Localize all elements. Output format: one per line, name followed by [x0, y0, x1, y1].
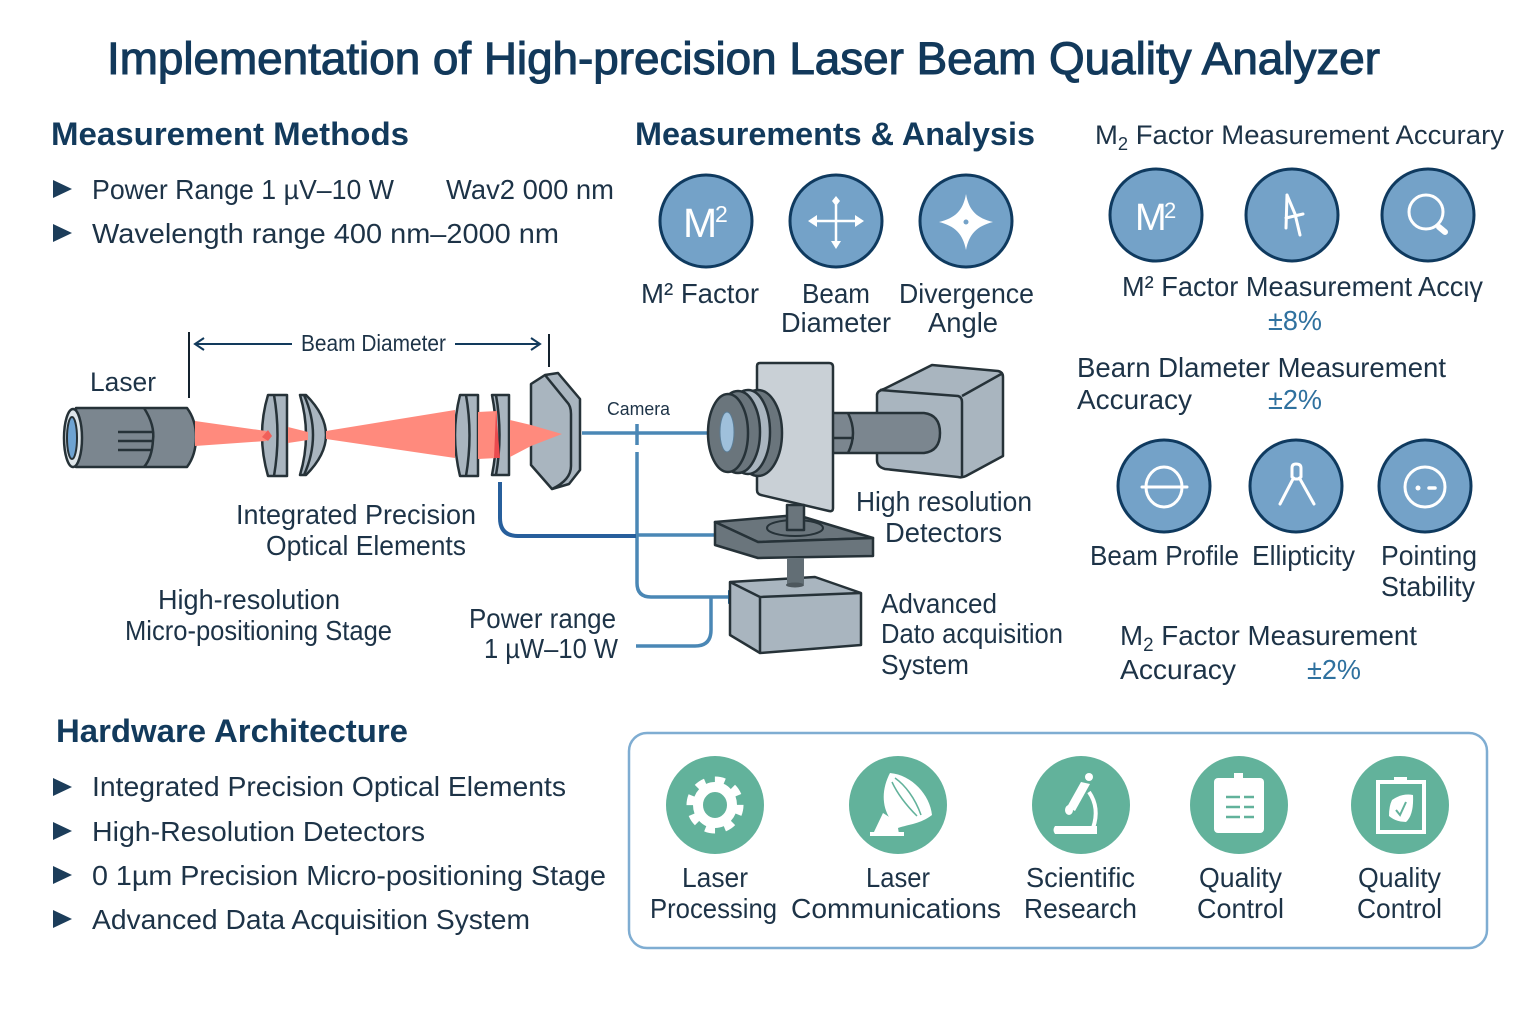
text: M2 factor accuracy: M² Factor Measurement Accιγ [1122, 271, 1483, 302]
panel: accuracy specifications [1077, 120, 1504, 685]
panel: applications [629, 733, 1487, 948]
label: M squared factor: M² Factor [641, 278, 759, 309]
icon: quality clipboard [1351, 756, 1449, 854]
label: advanced data acquisition system [881, 588, 1063, 680]
label: advanced data acquisition system: Advanced [881, 588, 997, 619]
bullet list: High-Resolution Detectors [92, 816, 425, 847]
text: M2 factor accuracy [1120, 620, 1417, 685]
label: laser: Laser [90, 367, 156, 397]
laser body [64, 408, 196, 467]
label: quality control: Control [1197, 893, 1284, 924]
icon: gear [666, 756, 764, 854]
heading: M2 factor measurement accuracy: M [1095, 120, 1118, 150]
label: quality control: Quality [1358, 862, 1441, 893]
label: quality control: Quality [1199, 862, 1282, 893]
label: ellipticity: Ellipticity [1252, 540, 1355, 571]
label: beam diameter: Diameter [781, 307, 891, 338]
label: integrated precision optical elements [236, 499, 476, 561]
icon: M squared: M [1135, 197, 1167, 239]
label: scientific research: Research [1024, 893, 1137, 924]
label: pointing stability: Pointing [1381, 540, 1477, 571]
heading: M2 factor measurement accuracy: Factor Measurement Accurary [1128, 120, 1504, 150]
power range text: Power Range 1 µV–10 W [92, 174, 395, 205]
label: power range: 1 µW–10 W [484, 633, 619, 664]
panel: measurements and analysis [635, 116, 1035, 338]
label: beam diameter [781, 278, 891, 338]
camera housing box [877, 365, 1003, 478]
beam diameter dimension [189, 330, 549, 398]
label: beam profile: Beam Profile [1090, 540, 1239, 571]
bullet icon [53, 224, 72, 242]
label: advanced data acquisition system: Dato acquisition [881, 618, 1063, 649]
text: beam diameter accuracy: Bearn Dlameter Measurement [1077, 352, 1446, 383]
label: divergence angle [899, 278, 1034, 338]
label: laser processing: Laser [682, 862, 748, 893]
text: M2 factor accuracy: 2 [1143, 635, 1154, 656]
laser beam [195, 410, 562, 459]
label: laser processing [650, 862, 777, 924]
bullet list: Advanced Data Acquisition System [92, 904, 530, 935]
label: high resolution detectors [856, 486, 1032, 548]
lens group 1 [262, 395, 326, 476]
value: ±2% [1268, 384, 1322, 415]
wavelength fragment text: Wav2 000 nm [446, 174, 614, 205]
icon: beam profile [1118, 440, 1210, 532]
wavelength range text: Wavelength range 400 nm–2000 nm [92, 218, 559, 249]
bullet icon [53, 180, 72, 198]
label: pointing stability: Stability [1381, 571, 1475, 602]
icon: M squared [660, 175, 752, 267]
camera plate [757, 363, 833, 511]
label: advanced data acquisition system: System [881, 649, 969, 680]
lens group 2 [455, 395, 509, 476]
label: camera: Camera [607, 399, 671, 419]
label: scientific research: Scientific [1026, 862, 1135, 893]
label: laser communications [791, 862, 1001, 924]
icon: microscope [1032, 756, 1130, 854]
label: scientific research [1024, 862, 1137, 924]
text: M2 factor accuracy: M [1120, 620, 1143, 651]
text: beam diameter accuracy [1077, 352, 1446, 415]
icon: satellite dish [849, 756, 947, 854]
label: power range: Power range [469, 603, 616, 634]
icon: pointing stability [1379, 440, 1471, 532]
label: laser processing: Processing [650, 893, 777, 924]
panel: measurement methods [51, 116, 614, 249]
bullet list [53, 771, 606, 935]
label: laser communications: Communications [791, 893, 1001, 924]
icon: magnifier [1382, 169, 1474, 261]
title: Implementation of High-precision Laser Beam Quality Analyzer [107, 33, 1380, 84]
label: quality control [1197, 862, 1284, 924]
icon: M squared: M [683, 200, 717, 246]
positioning stage [715, 505, 873, 558]
icon: M squared: 2 [715, 201, 728, 227]
diagram: optical system [64, 330, 1063, 680]
camera tube [832, 413, 940, 453]
beam diameter dimension: Beam Diameter [301, 330, 446, 356]
icon: M squared: 2 [1164, 198, 1176, 223]
label: micro-positioning stage [125, 584, 392, 646]
label: quality control: Control [1357, 893, 1442, 924]
data acquisition unit [730, 558, 861, 653]
prism [531, 373, 580, 489]
heading: measurements and analysis: Measurements & Analysis [635, 116, 1035, 152]
label: micro-positioning stage: High-resolution [158, 584, 340, 615]
value: ±2% [1307, 654, 1361, 685]
text: beam diameter accuracy: Accuracy [1077, 384, 1192, 415]
icon: clipboard [1190, 756, 1288, 854]
label: divergence angle: Angle [928, 307, 998, 338]
applications border [629, 733, 1487, 948]
label: micro-positioning stage: Micro-positioning Stage [125, 615, 392, 646]
icon: beam diameter arrows [790, 175, 882, 267]
icon: pointer [1246, 169, 1338, 261]
bullet list: Integrated Precision Optical Elements [92, 771, 566, 802]
icon: divergence star [920, 175, 1012, 267]
label: laser communications: Laser [866, 862, 930, 893]
heading: measurement methods: Measurement Methods [51, 116, 409, 152]
label: integrated precision optical elements: Optical Elements [266, 530, 466, 561]
label: high resolution detectors: High resolution [856, 486, 1032, 517]
label: quality control [1357, 862, 1442, 924]
label: integrated precision optical elements: Integrated Precision [236, 499, 476, 530]
camera lens [708, 390, 782, 476]
icon: compass [1250, 440, 1342, 532]
bullet list: 0 1µm Precision Micro-positioning Stage [92, 860, 606, 891]
heading: hardware architecture: Hardware Architecture [56, 713, 408, 749]
label: power range [469, 603, 619, 664]
signal wires [500, 424, 743, 646]
label: pointing stability [1381, 540, 1477, 602]
text: M2 factor accuracy: Factor Measurement [1154, 620, 1417, 651]
heading: M2 factor measurement accuracy: 2 [1118, 134, 1128, 154]
panel: hardware architecture [53, 713, 606, 935]
text: M2 factor accuracy: Accuracy [1120, 654, 1236, 685]
icon: M squared [1110, 169, 1202, 261]
label: beam diameter: Beam [802, 278, 870, 309]
value: ±8% [1268, 305, 1322, 336]
label: divergence angle: Divergence [899, 278, 1034, 309]
label: high resolution detectors: Detectors [885, 517, 1002, 548]
